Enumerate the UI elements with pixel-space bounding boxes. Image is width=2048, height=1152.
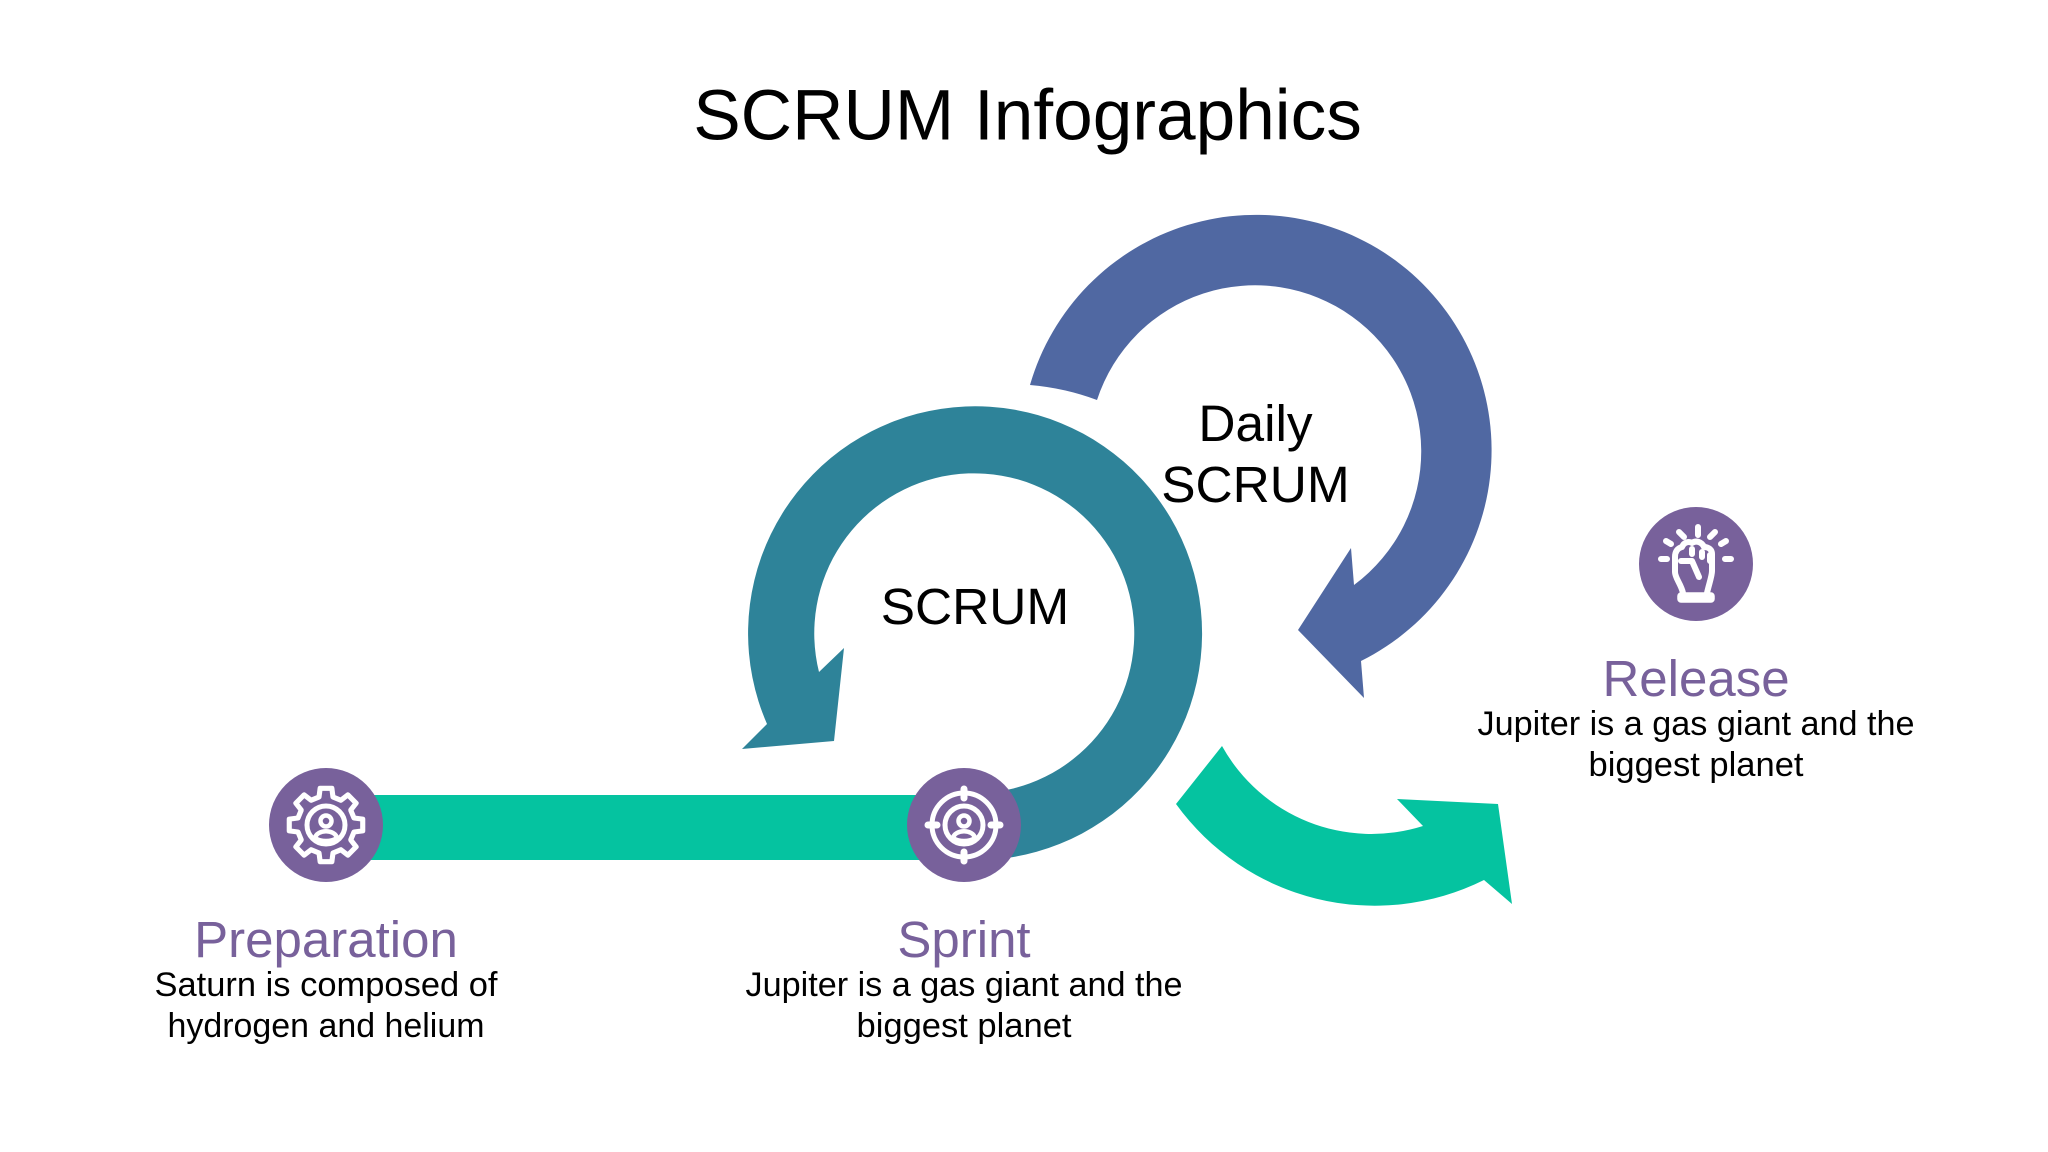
icon: preparation gear [269,768,383,882]
text: release: biggest planet [1588,746,1804,784]
label: daily scrum: Daily [1198,394,1313,452]
label: daily scrum [1161,394,1350,513]
text: preparation: Preparation [194,911,458,968]
text: preparation: hydrogen and helium [168,1007,484,1045]
text: preparation: Saturn is composed of [154,966,498,1004]
text: sprint: Sprint [897,911,1031,968]
arrow: release [1176,746,1512,906]
title: SCRUM Infographics [693,76,1362,156]
text: sprint: biggest planet [856,1007,1072,1045]
text: release: Jupiter is a gas giant and the [1478,705,1914,743]
text: preparation [154,911,498,1045]
arrow: daily scrum loop [1030,215,1492,698]
text: release: Release [1602,650,1790,707]
bar: preparation to sprint [340,795,970,860]
icon: release fist [1639,507,1753,621]
text: sprint: Jupiter is a gas giant and the [746,966,1182,1004]
icon: sprint target [907,768,1021,882]
arrow: scrum loop [742,406,1202,860]
label: scrum: SCRUM [881,577,1069,635]
text: release [1478,650,1914,784]
label: daily scrum: SCRUM [1161,455,1350,513]
text: sprint [746,911,1182,1045]
